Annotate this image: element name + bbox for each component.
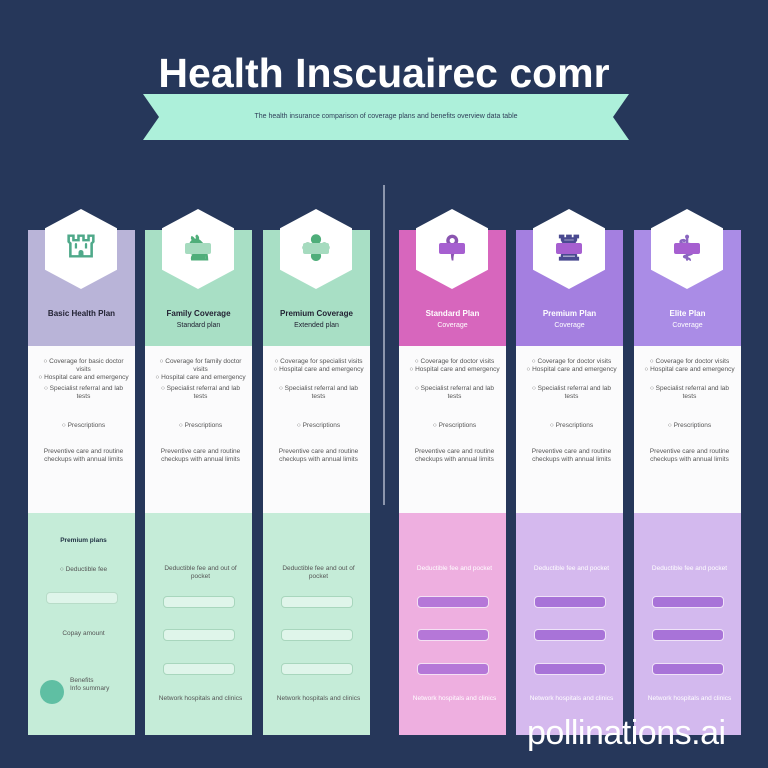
panel: column 5: Preventive care and routine checkups with annual limits: [532, 448, 611, 463]
icon: ♜: [554, 230, 584, 268]
panel: column 4: Coverage: [437, 322, 468, 329]
panel: column 5: Network hospitals and clinics: [530, 695, 613, 702]
title: Health Inscuairec comr: [158, 50, 610, 96]
panel: column 4: [399, 209, 506, 735]
panel: column 3: Network hospitals and clinics: [277, 695, 360, 702]
panel: column 6: ○ Specialist referral and lab tests: [650, 385, 729, 400]
panel: column 5: ○ Specialist referral and lab tests: [532, 385, 611, 400]
panel: column 2: Family Coverage: [166, 309, 231, 318]
panel: column 1: ○ Hospital care and emergency: [38, 374, 129, 381]
panel: column 2: Deductible fee and out of pocket: [164, 565, 237, 580]
watermark: pollinations.ai: [527, 714, 726, 752]
panel: column 5: [516, 209, 623, 735]
divider: [383, 185, 385, 505]
icon: ⚘: [437, 230, 467, 268]
panel: column 2: Standard plan: [177, 322, 220, 329]
panel: column 3: ○ Prescriptions: [297, 422, 340, 429]
panel: column 1: ○ Coverage for basic doctor visits: [43, 358, 124, 373]
panel: column 6: ○ Hospital care and emergency: [644, 366, 735, 373]
icon: [162, 209, 234, 289]
panel: column 1: Preventive care and routine checkups with annual limits: [44, 448, 123, 463]
panel: column 2: ○ Coverage for family doctor visits: [160, 358, 241, 373]
panel: column 4: ○ Specialist referral and lab tests: [415, 385, 494, 400]
panel: column 5: ○ Hospital care and emergency: [526, 366, 617, 373]
panel: column 4: Standard Plan: [426, 309, 479, 318]
panel: column 5: Premium Plan: [543, 309, 596, 318]
panel: column 6: Network hospitals and clinics: [648, 695, 731, 702]
panel: column 3: ○ Hospital care and emergency: [273, 366, 364, 373]
panel: column 5: ○ Coverage for doctor visits: [532, 358, 611, 365]
panel: column 3: [263, 209, 370, 735]
icon: ⚕: [678, 230, 696, 268]
panel: column 1: Premium plans: [60, 537, 107, 544]
panel: column 1: ○ Specialist referral and lab tests: [44, 385, 123, 400]
panel: column 6: Preventive care and routine checkups with annual limits: [650, 448, 729, 463]
panel: column 2: ○ Prescriptions: [179, 422, 222, 429]
panel: column 6: Deductible fee and pocket: [652, 565, 727, 572]
panel: column 3: ○ Coverage for specialist visits: [274, 358, 363, 365]
panel: column 1: ○ Prescriptions: [62, 422, 105, 429]
panel: column 1: [28, 209, 135, 735]
icon: badge: [40, 680, 64, 704]
panel: column 2: [145, 209, 252, 735]
ribbon banner: [143, 94, 629, 140]
panel: column 6: ○ Coverage for doctor visits: [650, 358, 729, 365]
panel: column 5: ○ Prescriptions: [550, 422, 593, 429]
panel: column 1: Benefits: [70, 677, 94, 684]
panel: column 3: Extended plan: [294, 322, 339, 329]
panel: column 4: ○ Prescriptions: [433, 422, 476, 429]
panel: column 6: Elite Plan: [669, 309, 706, 318]
subtitle: The health insurance comparison of coverage plans and benefits overview data table: [254, 113, 518, 120]
icon: [533, 209, 605, 289]
panel: column 4: Deductible fee and pocket: [417, 565, 492, 572]
icon: [416, 209, 488, 289]
icon: [45, 209, 117, 289]
icon: ♞: [183, 230, 213, 268]
panel: column 2: ○ Specialist referral and lab tests: [161, 385, 240, 400]
panel: column 3: Premium Coverage: [280, 309, 353, 318]
panel: column 4: Network hospitals and clinics: [413, 695, 496, 702]
panel: column 1: ○ Deductible fee: [60, 566, 107, 573]
panel: column 6: ○ Prescriptions: [668, 422, 711, 429]
icon: [280, 209, 352, 289]
panel: column 2: Network hospitals and clinics: [159, 695, 242, 702]
panel: column 1: Copay amount: [62, 630, 105, 637]
panel: column 1: Basic Health Plan: [48, 309, 115, 318]
panel: column 2: ○ Hospital care and emergency: [155, 374, 246, 381]
panel: column 4: Preventive care and routine checkups with annual limits: [415, 448, 494, 463]
icon: ⛫: [65, 227, 97, 265]
panel: column 1: Info summary: [70, 685, 109, 692]
panel: column 3: Deductible fee and out of pocket: [282, 565, 355, 580]
panel: column 3: ○ Specialist referral and lab tests: [279, 385, 358, 400]
icon: ✤: [302, 230, 330, 268]
panel: column 6: [634, 209, 741, 735]
panel: column 5: Coverage: [554, 322, 585, 329]
panel: column 6: Coverage: [672, 322, 703, 329]
panel: column 4: ○ Coverage for doctor visits: [415, 358, 494, 365]
panel: column 3: Preventive care and routine checkups with annual limits: [279, 448, 358, 463]
panel: column 4: ○ Hospital care and emergency: [409, 366, 500, 373]
panel: column 5: Deductible fee and pocket: [534, 565, 609, 572]
icon: [651, 209, 723, 289]
panel: column 2: Preventive care and routine checkups with annual limits: [161, 448, 240, 463]
